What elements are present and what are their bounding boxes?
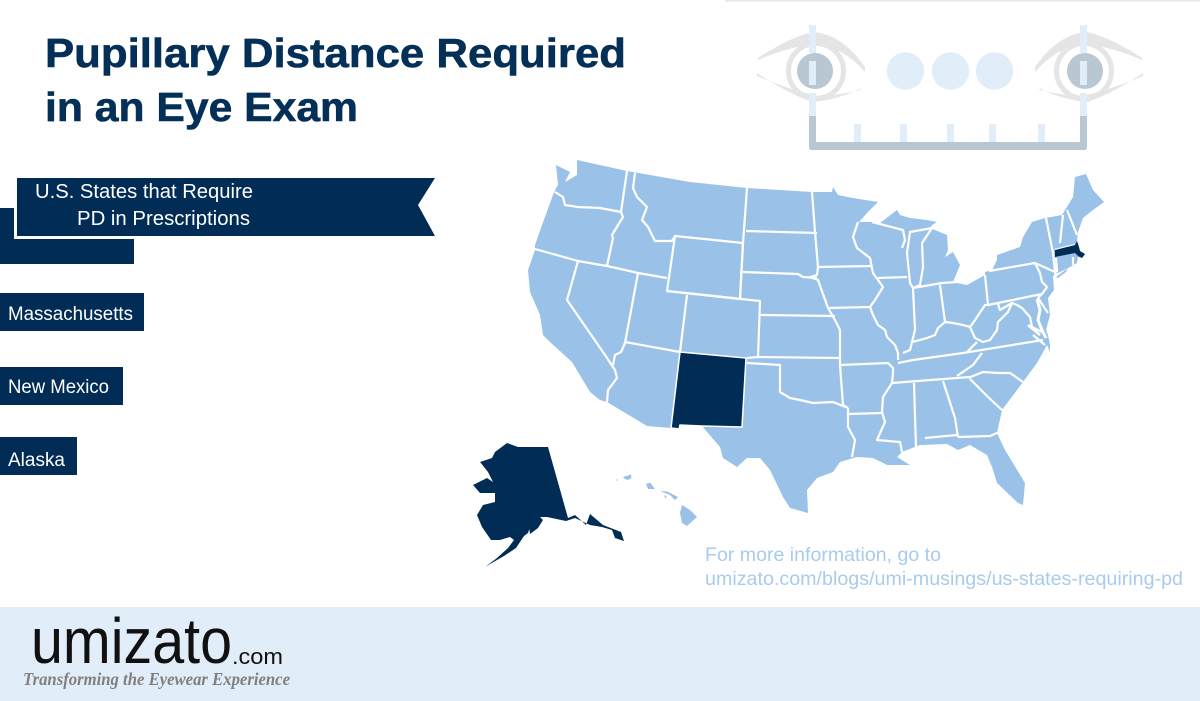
logo: Transforming the Eyewear Experience <box>23 669 290 689</box>
state borders <box>535 171 1077 457</box>
list item: Alaska <box>0 437 77 475</box>
ribbon heading <box>14 175 437 239</box>
list item: Alaska: Alaska <box>8 450 65 471</box>
footer band <box>0 607 1200 701</box>
text block: more information: umizato.com/blogs/umi-musings/us-states-requiring-pd <box>705 568 1183 590</box>
ribbon heading: PD in Prescriptions <box>77 208 250 230</box>
title: Pupillary Distance Required <box>45 30 626 76</box>
list item: hidden bar behind ribbon <box>0 208 134 264</box>
icon: three dots <box>887 52 1013 90</box>
state: New Mexico <box>671 352 746 429</box>
list item: New Mexico <box>0 367 123 405</box>
icon: ruler <box>809 25 1087 150</box>
map: contiguous states <box>528 160 1104 513</box>
state: Alaska <box>473 443 624 567</box>
text block: more information: For more information, go to <box>705 544 941 566</box>
list item: Massachusetts: Massachusetts <box>8 304 133 325</box>
ribbon heading: U.S. States that Require <box>35 181 253 203</box>
state: Hawaii <box>616 474 697 526</box>
icon: eyes with pupillary distance ruler <box>757 25 1143 150</box>
title: in an Eye Exam <box>45 84 358 130</box>
title <box>45 30 626 130</box>
map: United States <box>473 160 1104 567</box>
logo: umizato <box>31 605 232 677</box>
icon: left eye <box>757 32 865 102</box>
state: Massachusetts <box>1055 241 1085 258</box>
logo: .com <box>232 644 283 669</box>
icon: right eye <box>1035 32 1143 102</box>
Long Island <box>1056 268 1068 278</box>
text block: more information <box>705 544 1183 590</box>
list item: Massachusetts <box>0 293 144 331</box>
panel: state list <box>0 175 437 475</box>
list item: New Mexico: New Mexico <box>8 377 109 398</box>
